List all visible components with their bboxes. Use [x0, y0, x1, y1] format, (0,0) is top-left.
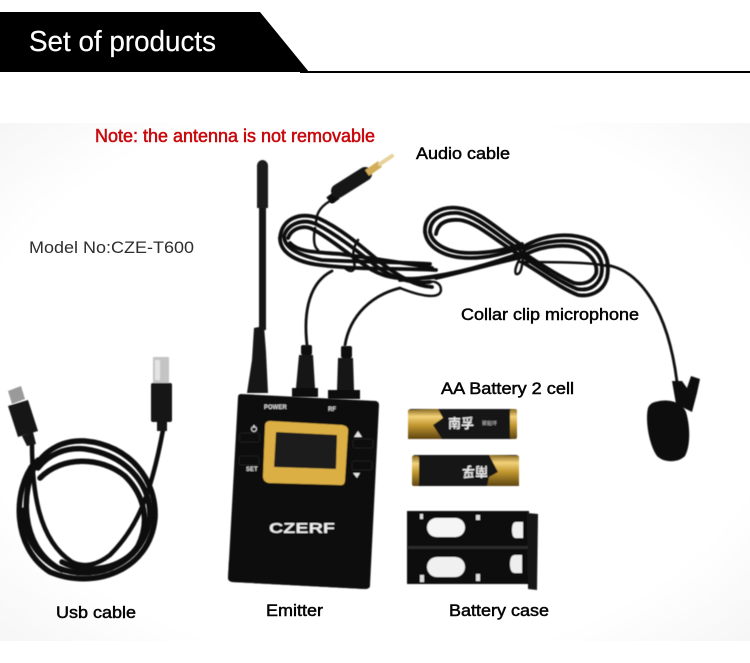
usb cable — [8, 357, 172, 579]
left connector — [292, 345, 318, 397]
model number: Model No:CZE-T600 — [29, 238, 194, 257]
usb a plug — [151, 357, 172, 431]
note: Note: the antenna is not removable — [95, 126, 375, 146]
emitter cable right — [345, 288, 400, 345]
power icon — [252, 425, 256, 432]
right cable loop — [400, 208, 608, 296]
emitter cable left — [306, 271, 332, 345]
emitter connectors — [292, 345, 360, 399]
left buttons — [239, 433, 260, 465]
down arrow — [353, 473, 360, 478]
label: emitter: Emitter — [266, 601, 323, 620]
power label: POWER — [264, 405, 287, 411]
right buttons — [352, 439, 373, 470]
left cable loop — [280, 201, 436, 287]
battery bottom: 南孚 — [462, 464, 488, 479]
audio jack — [329, 156, 392, 201]
micro usb plug — [8, 386, 38, 446]
clip — [672, 376, 700, 412]
label: battery case: Battery case — [449, 601, 549, 620]
battery top: 聚能环 — [482, 420, 497, 427]
brand: CZERF — [269, 520, 335, 537]
foam windscreen — [647, 400, 689, 461]
screen — [274, 432, 337, 469]
coil — [19, 430, 163, 579]
emitter — [228, 394, 379, 589]
antenna — [247, 160, 268, 393]
battery case — [407, 511, 538, 590]
right connector — [328, 346, 360, 399]
battery top: 南孚 — [448, 416, 474, 431]
emitter body — [228, 394, 379, 589]
label: collar clip microphone: Collar clip microphone — [461, 305, 639, 324]
battery top — [408, 409, 517, 439]
photo backdrop — [0, 123, 750, 641]
set label: SET — [246, 467, 258, 473]
header banner — [0, 12, 750, 73]
up arrow — [354, 431, 362, 437]
microphone — [647, 376, 700, 461]
heading: Set of products — [29, 26, 216, 58]
microphone cable — [606, 265, 677, 382]
audio and microphone cables — [280, 201, 677, 382]
label: audio cable: Audio cable — [416, 144, 510, 163]
rf label: RF — [328, 407, 336, 413]
label: usb cable: Usb cable — [56, 603, 136, 622]
label: aa battery: AA Battery 2 cell — [441, 379, 574, 398]
screen bezel — [263, 421, 348, 485]
aa batteries — [408, 409, 519, 486]
